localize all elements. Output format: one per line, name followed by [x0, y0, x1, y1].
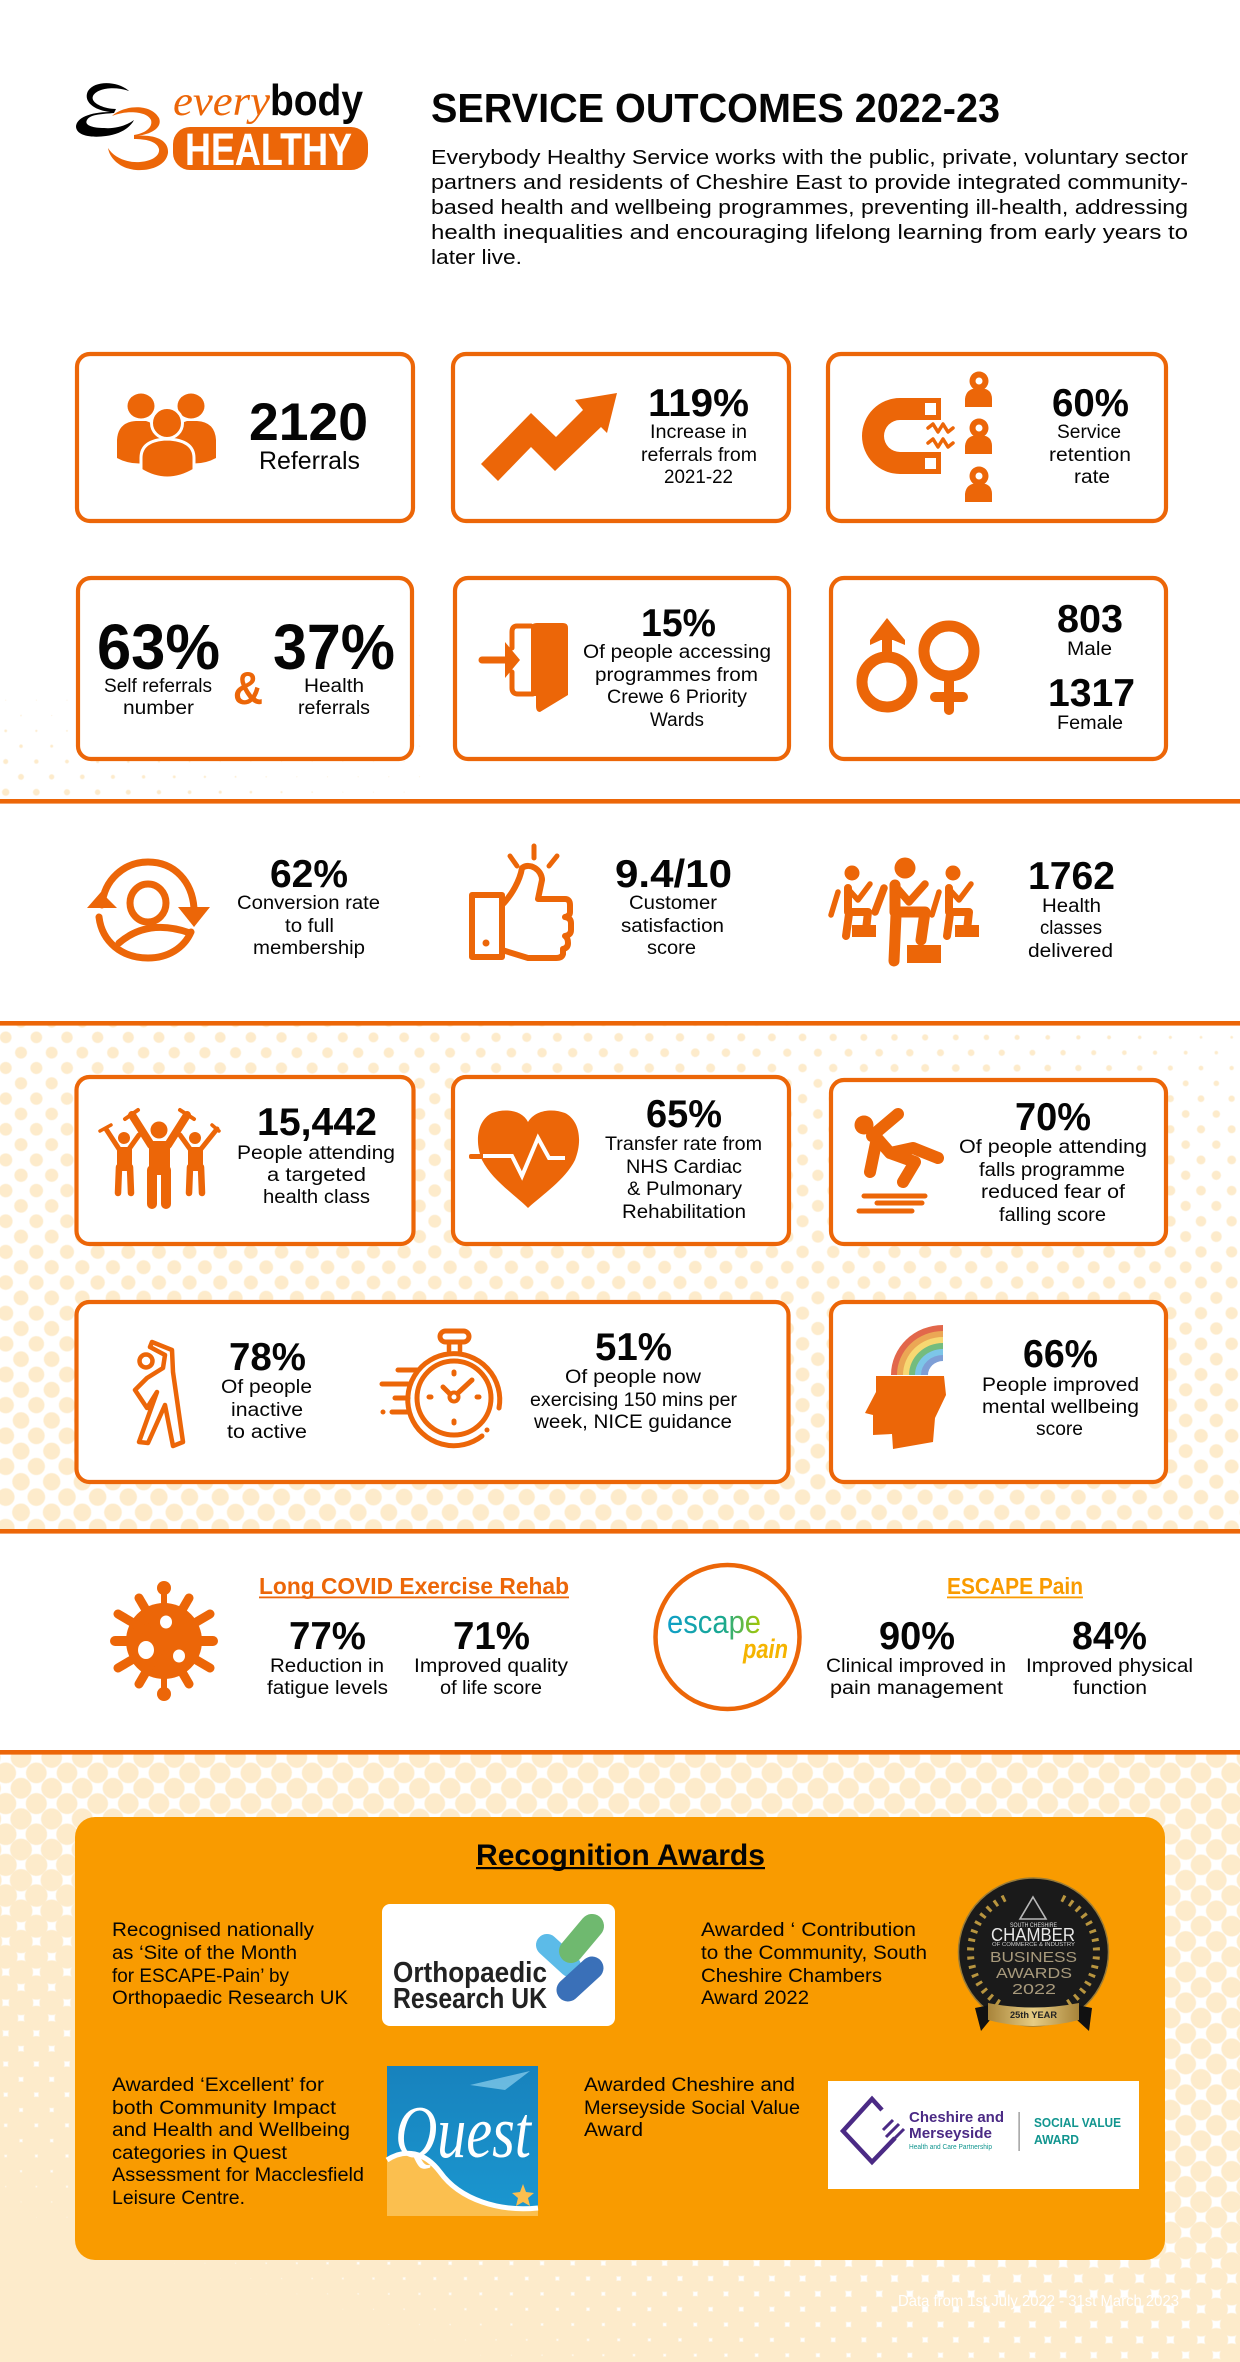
caption — [1026, 1656, 1193, 1699]
logo: Everybody Healthy: body — [270, 76, 363, 125]
icon: stretching figure — [135, 1342, 183, 1446]
award text: Quest: Assessment for Macclesfield — [112, 2165, 364, 2186]
caption: health referrals: referrals — [298, 698, 370, 719]
caption — [530, 1367, 738, 1433]
caption: 2021-22 — [664, 467, 733, 488]
icon: people group — [117, 394, 216, 478]
stat: 66%: 66% — [1023, 1333, 1098, 1376]
heading: ESCAPE Pain — [947, 1573, 1083, 1599]
logo: Cheshire and Merseyside Social Value Award: SOCIAL VALUE — [1034, 2115, 1121, 2130]
award text: Quest: categories in Quest — [112, 2143, 288, 2164]
caption: People improved — [982, 1375, 1139, 1396]
caption: Improved quality — [414, 1656, 569, 1677]
award text: Cheshire and Merseyside: Merseyside Social Value — [584, 2098, 800, 2119]
caption: score — [1036, 1419, 1083, 1440]
icon: thumbs up — [472, 846, 571, 958]
caption: Clinical improved in — [826, 1656, 1006, 1677]
badge: Chamber Business Awards 2022 — [958, 1878, 1108, 2031]
icon: head with rainbow — [865, 1325, 946, 1449]
award text: Cheshire and Merseyside — [584, 2075, 800, 2141]
award text: Orthopaedic Research UK: as ‘Site of the Month — [112, 1943, 297, 1964]
stat: 65%: 65% — [646, 1093, 722, 1136]
caption: self referrals: Self referrals — [104, 676, 212, 697]
caption: score — [647, 938, 696, 959]
caption — [237, 1143, 395, 1208]
panel: activity levels — [76, 1302, 788, 1482]
icon: magnet attracting people — [862, 372, 992, 502]
badge: Chamber Business Awards 2022: AWARDS — [996, 1965, 1072, 1982]
award text: South Cheshire Chambers — [701, 1920, 927, 2009]
caption: Of people now — [565, 1367, 701, 1388]
caption: Rehabilitation — [622, 1202, 746, 1223]
caption: inactive — [231, 1400, 303, 1421]
award text: Quest: and Health and Wellbeing — [112, 2120, 350, 2141]
stat block: health classes — [831, 855, 1115, 963]
logo: Orthopaedic Research UK — [382, 1904, 615, 2026]
caption: a targeted — [267, 1165, 366, 1186]
icon: heart with pulse — [469, 1110, 579, 1208]
stat: 1762: 1762 — [1028, 855, 1115, 898]
caption: Of people attending — [959, 1137, 1147, 1158]
caption — [826, 1656, 1006, 1699]
icon: male and female symbols — [862, 618, 974, 710]
caption: health referrals — [298, 676, 370, 719]
footnote: data period: Data from 1st July 2022 - 31st March 2023 — [898, 2293, 1179, 2310]
icon: person with circular arrows — [87, 862, 210, 958]
icon: person falling — [854, 1114, 938, 1211]
caption — [641, 422, 757, 488]
badge: Chamber Business Awards 2022: 25th YEAR — [1010, 2010, 1058, 2020]
caption: fatigue levels — [267, 1678, 388, 1699]
caption: health referrals: Health — [304, 676, 364, 697]
heading: Recognition Awards — [476, 1839, 765, 1872]
stat block: conversion rate — [87, 853, 380, 959]
caption: Wards — [650, 710, 704, 731]
stat: 71%: 71% — [453, 1615, 530, 1658]
caption: satisfaction — [621, 916, 724, 937]
intro text block: partners and residents of Cheshire East to provide integrated community- — [431, 172, 1188, 194]
ampersand: & — [233, 662, 263, 714]
award text: Quest: Leisure Centre. — [112, 2188, 245, 2209]
caption: self referrals — [104, 676, 212, 719]
icon: rising arrow — [481, 393, 617, 481]
title: SERVICE OUTCOMES 2022-23 — [431, 85, 1000, 131]
logo: ESCAPE pain roundel: pain — [742, 1634, 788, 1664]
panel: priority wards — [455, 578, 789, 759]
award text: Orthopaedic Research UK: for ESCAPE-Pain’ by — [112, 1966, 289, 1987]
award text: Cheshire and Merseyside: Awarded Cheshire and — [584, 2075, 795, 2096]
award text: Quest — [112, 2075, 364, 2209]
panel: mental wellbeing — [831, 1302, 1166, 1482]
caption: falling score — [999, 1205, 1106, 1226]
section: Long COVID Exercise Rehab — [115, 1573, 569, 1701]
stat: 9.4/10: 9.4/10 — [615, 853, 732, 896]
logo: Everybody Healthy — [76, 76, 368, 175]
caption: Improved physical — [1026, 1656, 1193, 1677]
icon: step class figures — [831, 858, 979, 963]
caption: health class — [263, 1187, 370, 1208]
panel: self and health referrals — [78, 578, 412, 759]
badge: Chamber Business Awards 2022: BUSINESS — [990, 1949, 1077, 1966]
caption: reduced fear of — [981, 1182, 1126, 1203]
panel: increase in referrals — [453, 354, 789, 521]
award text: South Cheshire Chambers: to the Community, South — [701, 1943, 927, 1964]
award text: South Cheshire Chambers: Cheshire Chambers — [701, 1966, 882, 1987]
caption — [414, 1656, 569, 1699]
award text: Orthopaedic Research UK — [112, 1920, 348, 2009]
intro text block: health inequalities and encouraging lifelong learning from early years to — [431, 222, 1188, 244]
caption: Conversion rate — [237, 893, 380, 914]
logo: ESCAPE pain roundel: escape — [667, 1604, 761, 1640]
intro text block: later live. — [431, 247, 522, 269]
caption — [237, 893, 380, 959]
stat: 119%: 119% — [648, 382, 749, 425]
logo: Everybody Healthy: every — [173, 79, 270, 125]
caption: Service — [1057, 422, 1121, 443]
intro text block: based health and wellbeing programmes, preventing ill-health, addressing — [431, 197, 1188, 219]
stat block: customer satisfaction — [472, 846, 732, 959]
caption — [605, 1134, 762, 1223]
icon: people lifting dumbbells — [100, 1110, 219, 1204]
logo: Orthopaedic Research UK: Orthopaedic — [393, 1957, 547, 1989]
award text: Orthopaedic Research UK: Orthopaedic Research UK — [112, 1988, 348, 2009]
stat: 70%: 70% — [1015, 1096, 1091, 1139]
caption — [221, 1377, 312, 1443]
stat: 62%: 62% — [270, 853, 348, 896]
stat: 37%: 37% — [273, 611, 395, 683]
award text: Orthopaedic Research UK: Recognised nationally — [112, 1920, 315, 1941]
stat: 15%: 15% — [641, 602, 716, 645]
caption: classes — [1040, 918, 1102, 939]
caption: referrals from — [641, 445, 757, 466]
caption: Referrals — [259, 447, 360, 475]
section: ESCAPE Pain — [826, 1573, 1193, 1699]
stat: 1317 female: 1317 — [1048, 672, 1135, 715]
caption: Of people accessing — [583, 642, 771, 663]
intro text block: Everybody Healthy Service works with the public, private, voluntary sector — [431, 147, 1188, 169]
caption: falls programme — [979, 1160, 1125, 1181]
icon: door with entry arrow — [482, 623, 568, 712]
caption: delivered — [1028, 941, 1113, 962]
logo: ESCAPE pain roundel — [656, 1565, 800, 1709]
caption: to active — [227, 1422, 307, 1443]
logo: Everybody Healthy: HEALTHY — [185, 124, 352, 175]
caption — [583, 642, 771, 731]
caption: Male — [1067, 639, 1112, 660]
award text: Cheshire and Merseyside: Award — [584, 2120, 643, 2141]
panel: targeted health class — [76, 1077, 414, 1244]
caption: pain management — [830, 1678, 1004, 1699]
stat: 15,442: 15,442 — [257, 1101, 377, 1144]
stat: 60%: 60% — [1052, 382, 1129, 425]
heading: Long COVID Exercise Rehab — [259, 1573, 569, 1599]
stat: 77%: 77% — [289, 1615, 366, 1658]
caption: mental wellbeing — [982, 1397, 1139, 1418]
caption — [1028, 896, 1113, 962]
caption: rate — [1074, 467, 1110, 488]
panel: falls programme — [831, 1080, 1166, 1244]
caption: People attending — [237, 1143, 395, 1164]
logo: Cheshire and Merseyside Social Value Award: Health and Care Partnership — [909, 2144, 992, 2151]
award text: South Cheshire Chambers: Awarded ‘ Contribution — [701, 1920, 916, 1941]
badge: Chamber Business Awards 2022: CHAMBER — [991, 1925, 1075, 1945]
stat: 51%: 51% — [595, 1326, 672, 1369]
badge: Chamber Business Awards 2022: OF COMMERCE & INDUSTRY — [992, 1942, 1076, 1948]
stat: 90%: 90% — [879, 1615, 955, 1658]
panel: cardiac transfer rate — [453, 1077, 789, 1244]
badge: Chamber Business Awards 2022: 2022 — [1012, 1981, 1056, 1998]
caption: Female — [1057, 713, 1123, 734]
caption: NHS Cardiac — [626, 1157, 742, 1178]
stat: 84%: 84% — [1072, 1615, 1147, 1658]
intro text block — [431, 147, 1188, 269]
badge: Chamber Business Awards 2022: SOUTH CHESHIRE — [1010, 1923, 1057, 1929]
caption: Of people — [221, 1377, 312, 1398]
caption: Transfer rate from — [605, 1134, 762, 1155]
caption: membership — [253, 938, 365, 959]
caption: self referrals: number — [123, 698, 195, 719]
stat: 803 male: 803 — [1057, 598, 1123, 641]
caption: exercising 150 mins per — [530, 1390, 738, 1411]
caption: retention — [1049, 445, 1131, 466]
caption: & Pulmonary — [627, 1179, 743, 1200]
caption: programmes from — [595, 665, 758, 686]
logo: Cheshire and Merseyside Social Value Award — [828, 2081, 1139, 2189]
icon: stopwatch — [380, 1331, 500, 1446]
panel: service retention — [828, 354, 1166, 521]
logo: Orthopaedic Research UK: Research UK — [393, 1983, 547, 2015]
panel: referrals — [77, 354, 413, 521]
panel: gender split — [831, 578, 1166, 759]
award text: South Cheshire Chambers: Award 2022 — [701, 1988, 809, 2009]
caption: Customer — [629, 893, 718, 914]
logo: Cheshire and Merseyside Social Value Award: AWARD — [1034, 2132, 1079, 2147]
stat: 63%: 63% — [97, 611, 220, 683]
award text: Quest: both Community Impact — [112, 2098, 337, 2119]
icon: virus — [115, 1581, 213, 1701]
stat: 78%: 78% — [229, 1336, 306, 1379]
caption: Crewe 6 Priority — [607, 687, 748, 708]
caption: Increase in — [650, 422, 747, 443]
caption: Reduction in — [270, 1656, 384, 1677]
panel: recognition awards — [75, 1817, 1165, 2260]
logo: Cheshire and Merseyside Social Value Award: Cheshire and — [909, 2109, 1004, 2126]
caption: week, NICE guidance — [533, 1412, 732, 1433]
logo: Cheshire and Merseyside Social Value Award: Merseyside — [909, 2125, 992, 2142]
caption — [959, 1137, 1147, 1226]
stat: 2120: 2120 — [249, 393, 368, 452]
logo: Quest: Quest — [395, 2092, 533, 2174]
logo: Quest — [387, 2066, 538, 2216]
caption — [1049, 422, 1131, 488]
caption: to full — [285, 916, 334, 937]
caption — [267, 1656, 388, 1699]
caption — [982, 1375, 1139, 1440]
caption: Health — [1042, 896, 1101, 917]
caption — [621, 893, 724, 959]
award text: Quest: Awarded ‘Excellent’ for — [112, 2075, 325, 2096]
caption: of life score — [440, 1678, 542, 1699]
caption: function — [1073, 1678, 1147, 1699]
